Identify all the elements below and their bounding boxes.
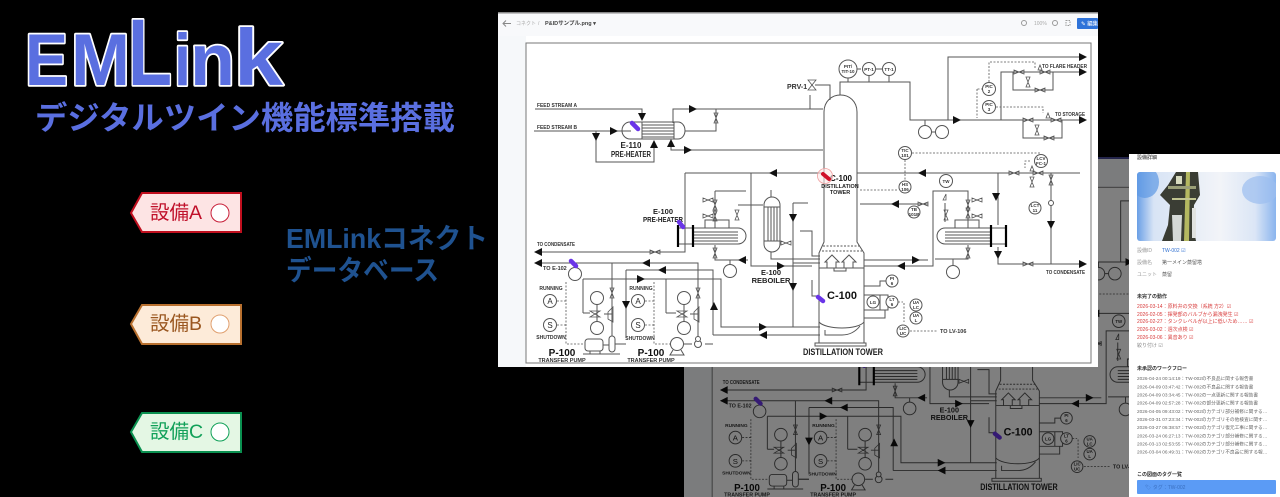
open actions list: 2026-03-06：異音あり ☑ (1137, 334, 1194, 341)
equipment attributes: TW-002 ☑ (1162, 248, 1186, 254)
equipment attributes: ユニット (1137, 272, 1157, 278)
distillation tower C-100: DISTILLATION (821, 184, 859, 190)
pump P-100 pair: SHUTDOWN (536, 335, 566, 341)
stream labels: TO E-102 (543, 266, 567, 272)
exchanger E-100 left (643, 207, 746, 247)
instrument bubbles: L (915, 318, 918, 323)
instrument bubbles: FC-1 (1036, 161, 1046, 166)
open actions list: 2026-03-14：原料弁の交換（系統 方2）☑ (1137, 303, 1232, 310)
instrument bubbles: PIC (985, 84, 993, 89)
instrument bubbles: PIT/ (844, 64, 853, 69)
tag: equipment A (131, 193, 241, 232)
pump P-100 pair: RUNNING (629, 286, 653, 292)
subtitle: デジタルツイン機能標準搭載 (35, 100, 455, 136)
tag list: 🏷 タグ：TW-002 (1145, 484, 1186, 491)
viewer toolbar: コネクト (516, 21, 536, 27)
process piping (534, 57, 1085, 344)
equipment detail side panel (1129, 154, 1280, 497)
stream labels: FEED STREAM A (537, 103, 577, 109)
viewer toolbar (503, 18, 1099, 29)
exchanger E-110 (611, 122, 685, 159)
open actions list: 未完了の動作 (1137, 293, 1167, 300)
pending workflow list: 2026-03-24 06:27:13：TW-002のカテゴリ部分補修に関する… (1137, 432, 1268, 440)
viewer toolbar: 100% (1034, 21, 1047, 27)
pump P-100 pair: A (547, 297, 553, 306)
exchanger E-100 left: E-100 (653, 207, 673, 216)
pending workflow list: 2026-03-04 06:49:31：TW-002のカテゴリ不良品に関する報… (1137, 448, 1268, 456)
instrument bubbles: 6 (891, 281, 894, 286)
pending workflow list (1137, 365, 1268, 456)
distillation tower C-100: C-100 (830, 173, 852, 183)
pending workflow list: 2026-04-09 03:34:45：TW-002の一点更新に関する報告書 (1137, 392, 1258, 398)
instrument bubbles: 106 (901, 187, 909, 192)
arrowheads (534, 53, 1087, 339)
stream labels: TO FLARE HEADER (1042, 64, 1087, 70)
equipment pins (571, 123, 832, 301)
tag list (1137, 471, 1276, 494)
reboiler: E-100 (761, 268, 781, 277)
instrument bubbles: TW (942, 179, 950, 184)
logo: EMLink (25, 0, 284, 106)
equipment attributes: 蒸留 (1162, 271, 1172, 278)
dashed control lines (557, 62, 1043, 344)
viewer toolbar: ✎ 編集 (1081, 20, 1099, 28)
instrument bubbles: 101B (909, 212, 920, 217)
pump P-100 pair: RUNNING (539, 286, 563, 292)
pump P-100 pair (536, 264, 960, 364)
pump P-100 pair: P-100 (549, 348, 576, 359)
pending workflow list: 2026-04-09 03:47:42：TW-002の不良品に関する報告書 (1137, 384, 1254, 390)
instrument bubbles: 3 (988, 107, 991, 112)
valves (590, 65, 1061, 322)
logo: EMLink: M (71, 20, 130, 101)
instrument bubbles: 6 (891, 302, 894, 307)
stream labels: TO CONDENSATE (1046, 270, 1085, 276)
pending workflow list: 2026-04-09 02:57:28：TW-002の部分更新に関する報告書 (1137, 400, 1258, 406)
logo: EMLink: n (190, 20, 235, 101)
tag: equipment C: 設備C (150, 421, 203, 443)
main P&ID viewer window (498, 12, 1099, 367)
reboiler (752, 197, 791, 285)
instrument bubbles: UC (900, 331, 907, 336)
instrument bubbles: HS (902, 182, 908, 187)
exchanger E-110: PRE-HEATER (611, 150, 651, 159)
instrument bubbles: 2 (988, 89, 991, 94)
tag: equipment A: 設備A (150, 202, 202, 224)
pump P-100 pair: S (635, 321, 641, 330)
instrument bubbles: LCT (1031, 203, 1040, 208)
exchanger E-100 left: PRE-HEATER (643, 215, 683, 224)
pending workflow list: 2026-04-05 09:43:02：TW-002のカテゴリ部分補修に関する… (1137, 408, 1268, 415)
open actions list: 2026-02-05：揮発部のバルブから漏洩発生 ☑ (1137, 311, 1239, 318)
exchanger E-110: E-110 (621, 141, 642, 150)
distillation tower C-100 (803, 95, 883, 357)
distillation tower C-100: TOWER (830, 190, 850, 196)
tag: equipment B (131, 305, 241, 344)
stream labels: TO STORAGE (1055, 112, 1085, 118)
pending workflow list: 2026-03-13 02:53:55：TW-002のカテゴリ部分補修に関する… (1137, 440, 1268, 448)
open actions list: 2026-03-02：週次点検 ☑ (1137, 326, 1194, 333)
tag list: この図面のタグ一覧 (1137, 471, 1182, 478)
pump P-100 pair: P-100 (638, 348, 665, 359)
instrument bubbles: 101 (901, 153, 909, 158)
open actions list (1137, 293, 1254, 349)
stream labels: TO CONDENSATE (537, 242, 575, 248)
pump P-100 pair: S (547, 321, 553, 330)
equipment attributes (1137, 247, 1202, 278)
logo: EMLink: i (174, 20, 191, 101)
instrument bubbles: 11 (1033, 208, 1038, 213)
stream labels (537, 64, 1087, 335)
instrument bubbles: PT-1 (864, 67, 874, 72)
instrument bubbles: TIT-10 (841, 69, 855, 74)
pump P-100 pair: A (635, 297, 641, 306)
distillation tower C-100: C-100 (827, 290, 857, 302)
tag: equipment C (131, 413, 241, 452)
P&ID diagram (526, 43, 1091, 364)
panel heading: 設備詳細 (1137, 154, 1157, 161)
instrument bubbles: TB (911, 207, 918, 212)
pending workflow list: 2026-04-24 00:14:19：TW-002の不良品に関する報告書 (1137, 375, 1254, 382)
instrument bubbles (839, 60, 1054, 337)
viewer toolbar: / (538, 21, 540, 27)
stream labels: TO LV-106 (940, 329, 966, 335)
logo: EMLink: E (25, 20, 68, 101)
label: EMLink connect database: データベース (286, 254, 439, 286)
instrument bubbles: TIC (901, 148, 909, 153)
tag: equipment B: 設備B (150, 313, 202, 335)
equipment attributes: 設備ID (1137, 247, 1152, 254)
pending workflow list: 未承認のワークフロー (1137, 365, 1187, 372)
instrument bubbles: UA (913, 300, 920, 305)
pump P-100 pair: TRANSFER PUMP (538, 358, 586, 364)
pending workflow list: 2026-03-31 07:23:34：TW-002のカテゴリその他検査に関す… (1137, 416, 1268, 423)
pending workflow list: 2026-03-27 06:38:57：TW-002のカテゴリ復元工事に関する… (1137, 424, 1268, 431)
equipment attributes: 第一メイン蒸留塔 (1162, 259, 1202, 266)
logo: EMLink: k (234, 13, 284, 102)
distillation tower C-100: DISTILLATION TOWER (803, 347, 883, 357)
stream labels: FEED STREAM B (537, 125, 577, 131)
equipment photo (1137, 172, 1276, 241)
open actions list: 絞り付け ☑ (1137, 342, 1163, 349)
instrument bubbles: PI (890, 276, 894, 281)
equipment attributes: 設備名 (1137, 259, 1152, 266)
exchanger E-100 right (937, 220, 1006, 247)
instrument bubbles: LCV (1036, 156, 1046, 161)
instrument bubbles: LG (870, 300, 877, 305)
instrument bubbles: LT (889, 297, 895, 302)
background dimmed screen (684, 157, 1129, 497)
instrument bubbles: TT-1 (884, 67, 894, 72)
instrument bubbles: UA (913, 313, 920, 318)
open actions list: 2026-02-27：タンクレベルが以上に低いため…… ☑ (1137, 318, 1254, 325)
instrument bubbles: LC (913, 305, 920, 310)
label: EMLink connect database: EMLinkコネクト (286, 223, 488, 254)
label: EMLink connect database (286, 223, 488, 286)
reboiler: REBOILER (752, 276, 791, 285)
pump P-100 pair: TRANSFER PUMP (627, 358, 675, 364)
instrument bubbles: LIC (899, 326, 907, 331)
pump P-100 pair: SHUTDOWN (625, 336, 655, 342)
instrument bubbles: PIC (985, 102, 993, 107)
stream labels: PRV-1 (787, 84, 807, 91)
viewer toolbar: P&IDサンプル.png ▾ (545, 20, 597, 27)
logo: EMLink: L (128, 0, 172, 106)
